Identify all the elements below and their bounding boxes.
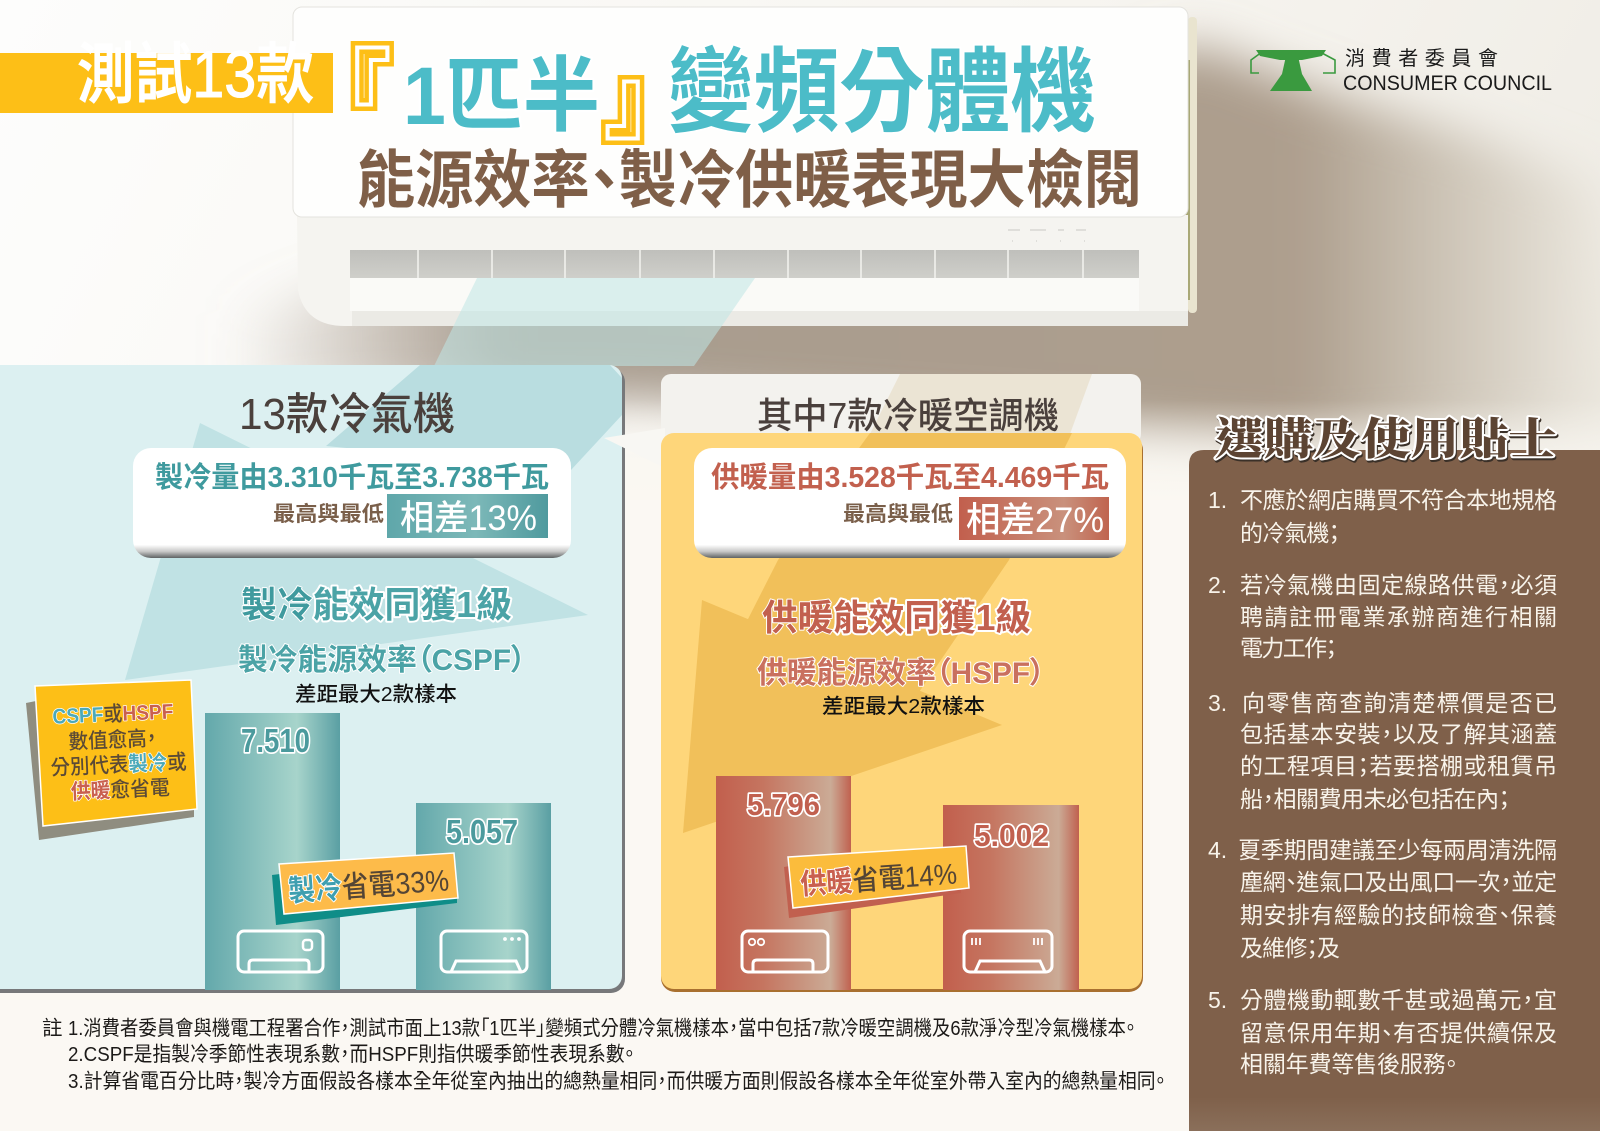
footnotes: 1.消費者委員會與機電工程署合作，測試市面上13款「1匹半」變頻式分體冷氣機樣本，當中包括7款冷暖空調機及6款淨冷型冷氣機樣本。: [68, 1017, 1135, 1040]
bar chart: CSPF: 7.510: [241, 722, 310, 759]
tip 5: 留意保用年期、有否提供續保及: [1240, 1020, 1557, 1046]
tip 5: 5.: [1208, 987, 1227, 1013]
tip 4: 夏季期間建議至少每兩周清洗隔: [1238, 837, 1557, 863]
tip 3: 船，相關費用未必包括在內；: [1240, 786, 1510, 812]
panel: 13 cooling air conditioners: [0, 365, 625, 993]
footnotes: 3.計算省電百分比時，製冷方面假設各樣本全年從室內抽出的總熱量相同，而供暖方面則假設各樣本全年從室外帶入室內的總熱量相同。: [68, 1070, 1165, 1093]
footnotes: 2.CSPF是指製冷季節性表現系數，而HSPF則指供暖季節性表現系數。: [68, 1043, 634, 1066]
icon: air conditioner A: [238, 931, 323, 972]
caption: largest difference samples: 差距最大2款樣本: [822, 695, 985, 718]
tip 2: [1208, 572, 1557, 661]
main title: [300, 42, 1096, 152]
tip 4: 期安排有經驗的技師檢查、保養: [1240, 902, 1557, 928]
tag: cooling saves 33 percent: 製冷省電33%: [287, 864, 450, 909]
main title: 』: [603, 50, 695, 152]
tip 4: 4.: [1208, 837, 1227, 863]
brand logo: Consumer Council: 消費者委員會: [1345, 47, 1498, 70]
callout: cooling capacity range: 相差13%: [400, 499, 537, 538]
main title: 『: [300, 42, 392, 144]
tip 5: 相關年費等售後服務。: [1240, 1051, 1457, 1077]
speech pointer: [604, 428, 665, 468]
tip 5: [1208, 987, 1557, 1077]
bar chart: CSPF: [205, 713, 551, 990]
heading: 13 air conditioners: 13款冷氣機: [239, 390, 455, 439]
heading: 7 heat pump air conditioners: 其中7款冷暖空調機: [757, 395, 1059, 436]
heading: heating grade 1: 供暖能效同獲1級: [762, 597, 1031, 638]
tip 2: 若冷氣機由固定線路供電，必須: [1240, 572, 1557, 598]
bar chart: HSPF: [716, 776, 1079, 990]
main title: 變頻分體機: [668, 42, 1096, 144]
tip 2: 2.: [1208, 572, 1227, 598]
tip 1: [1208, 487, 1557, 546]
tip 4: 及維修；及: [1240, 935, 1340, 961]
main title: 1匹半: [403, 51, 600, 142]
callout: cooling capacity range: 製冷量由3.310千瓦至3.738千瓦: [155, 461, 549, 494]
tip 1: 不應於網店購買不符合本地規格: [1240, 487, 1557, 513]
note: higher value saves more electricity: 數值愈高，: [68, 727, 157, 754]
heading: cooling grade 1: 製冷能效同獲1級: [241, 584, 512, 625]
cold air beam over the unit: [434, 278, 755, 366]
bar chart: HSPF: 5.002: [974, 818, 1049, 853]
tip 4: [1208, 837, 1557, 961]
tip 1: 1.: [1208, 487, 1227, 513]
subtitle: 能源效率、製冷供暖表現大檢閱: [357, 146, 1142, 216]
brand logo: Consumer Council: [1251, 47, 1552, 95]
tip 3: [1208, 690, 1557, 812]
note: higher value saves more electricity: 供暖愈省電: [70, 777, 170, 804]
icon: air conditioner C: [742, 931, 828, 972]
callout: cooling capacity range: [133, 448, 571, 558]
tip 1: 的冷氣機；: [1240, 520, 1340, 546]
caption: largest difference samples: 差距最大2款樣本: [295, 683, 457, 706]
callout: cooling capacity range: 最高與最低: [273, 502, 384, 526]
callout: heating capacity range: 供暖量由3.528千瓦至4.469千瓦: [711, 461, 1109, 494]
callout: heating capacity range: 最高與最低: [843, 502, 953, 526]
tag: cooling saves 33 percent: [272, 853, 458, 925]
heading: CSPF: 製冷能源效率（CSPF）: [238, 644, 526, 677]
note: higher value saves more electricity: [26, 680, 197, 840]
note: higher value saves more electricity: 分別代表製冷或: [50, 751, 187, 780]
tip 2: 聘請註冊電業承辦商進行相關: [1240, 604, 1557, 630]
note: higher value saves more electricity: CSPF或HSPF: [52, 700, 174, 729]
tip 2: 電力工作；: [1240, 635, 1337, 661]
brand logo: Consumer Council: CONSUMER COUNCIL: [1343, 72, 1552, 95]
icon: air conditioner B: [441, 931, 527, 972]
tip 3: 3.: [1208, 690, 1227, 716]
panel: buying and usage tips: [1189, 415, 1600, 1131]
tip 3: 的工程項目；若要搭棚或租賃吊: [1240, 753, 1557, 779]
heading: tips: 選購及使用貼士: [1215, 415, 1557, 464]
callout: heating capacity range: 相差27%: [966, 501, 1104, 540]
callout: heating capacity range: [694, 448, 1126, 558]
footnotes: [42, 1017, 1165, 1093]
bar chart: CSPF: 5.057: [446, 813, 518, 850]
tip 4: 塵網、進氣口及出風口一次，並定: [1240, 869, 1557, 895]
tip 3: 包括基本安裝，以及了解其涵蓋: [1240, 721, 1557, 747]
footnotes: 註: [42, 1017, 62, 1040]
panel: 7 heat pump models: [604, 374, 1143, 992]
air conditioner unit: [293, 7, 1197, 326]
tip 3: 向零售商查詢清楚標價是否已: [1242, 690, 1557, 716]
title banner: tested 13 models: 測試13款: [77, 37, 314, 111]
bar chart: HSPF: 5.796: [747, 787, 820, 822]
tag: heating saves 14 percent: 供暖省電14%: [799, 858, 958, 901]
icon: air conditioner D: [964, 931, 1052, 972]
tip 5: 分體機動輒數千甚或過萬元，宜: [1240, 987, 1557, 1013]
tag: heating saves 14 percent: [784, 846, 969, 918]
heading: HSPF: 供暖能源效率（HSPF）: [757, 657, 1045, 690]
